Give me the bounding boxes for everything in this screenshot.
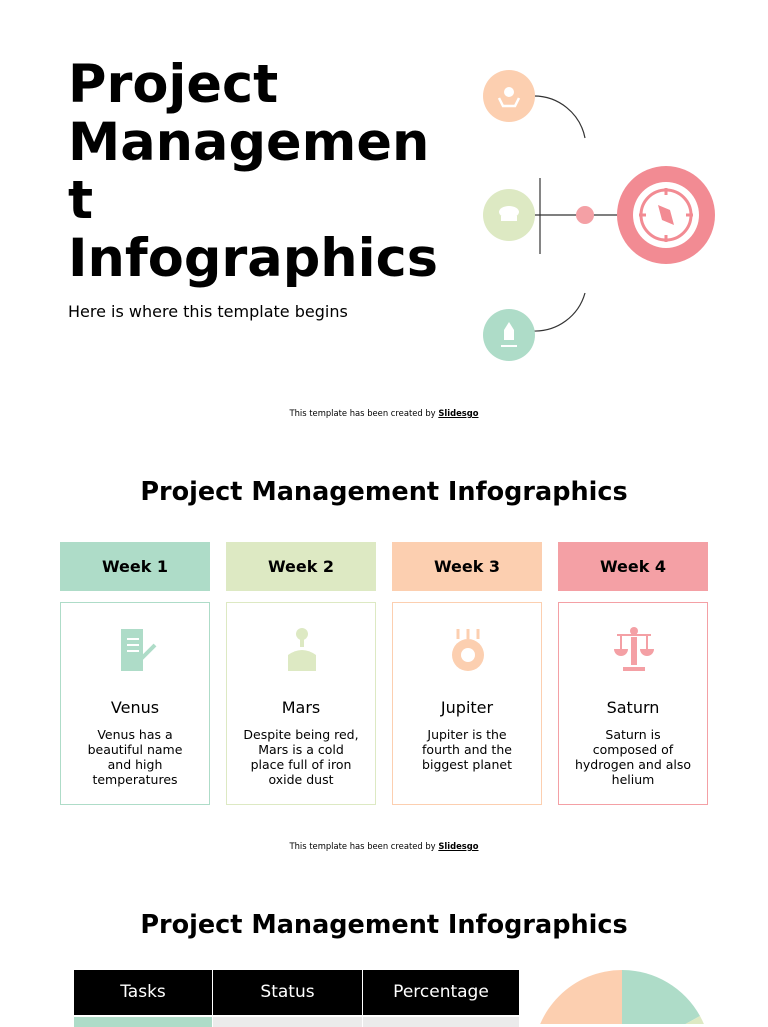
connector lines (533, 96, 620, 331)
text: Week 4 (600, 557, 666, 576)
text: Week 2 (268, 557, 334, 576)
dot (576, 206, 594, 224)
text: Week 3 (434, 557, 500, 576)
card: Mars (226, 602, 376, 805)
heading 3: Project Management Infographics (140, 910, 628, 940)
title (68, 54, 438, 289)
title: t (68, 170, 93, 231)
card: Saturn (558, 602, 708, 805)
card: Jupiter: Jupiter (441, 698, 493, 717)
week headers (60, 542, 210, 591)
title: Managemen (68, 112, 429, 173)
card: Jupiter (392, 602, 542, 805)
table (74, 970, 519, 1027)
title: Project (68, 54, 278, 115)
icon: idea hands (483, 70, 535, 122)
card: Saturn: Saturn is composed of hydrogen and also helium (575, 727, 691, 787)
icon: compass (617, 166, 715, 264)
icon: rocket (483, 309, 535, 361)
card: Venus: Venus (111, 698, 159, 717)
card: Jupiter: Jupiter is the fourth and the biggest planet (422, 727, 512, 772)
title: Infographics (68, 228, 438, 289)
week headers: Week 1 (102, 557, 168, 576)
table: Tasks (120, 982, 166, 1002)
card: Mars: Mars (282, 698, 320, 717)
table: Percentage (393, 982, 489, 1002)
pie chart (540, 970, 704, 1024)
card: Venus: Venus has a beautiful name and high temperatures (88, 727, 182, 787)
icon: hat (483, 189, 535, 241)
credit: This template has been created by Slidesgo (290, 408, 478, 418)
table: Status (260, 982, 315, 1002)
heading 2: Project Management Infographics (140, 477, 628, 507)
card: Mars: Despite being red, Mars is a cold place full of iron oxide dust (243, 727, 359, 787)
card: Saturn: Saturn (607, 698, 659, 717)
credit: This template has been created by Slidesgo (290, 841, 478, 851)
subtitle: Here is where this template begins (68, 302, 348, 321)
card: Venus (60, 602, 210, 805)
diagram: compass connections (483, 70, 715, 361)
